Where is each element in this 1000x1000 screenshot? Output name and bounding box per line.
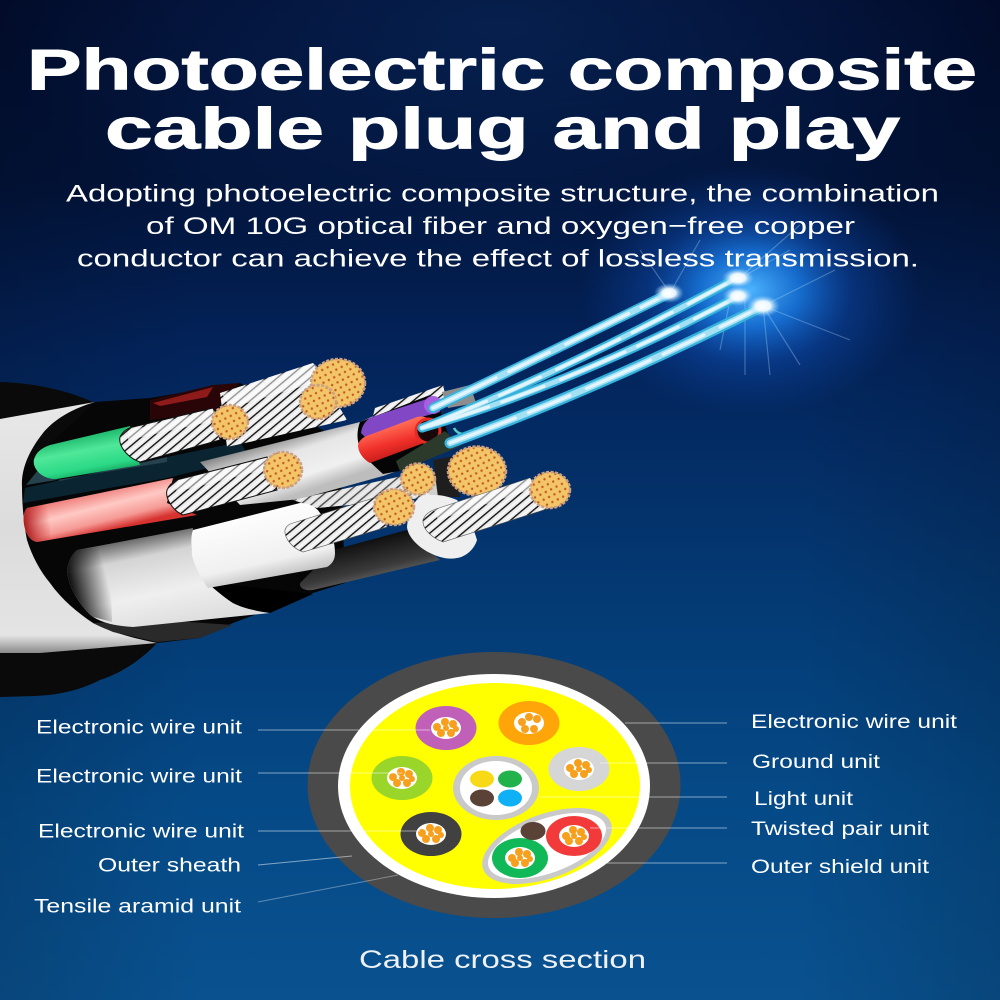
copper end bbox=[264, 452, 302, 488]
leader lines bbox=[258, 723, 727, 902]
outer black jacket bbox=[0, 382, 200, 697]
unit: orange wire bbox=[498, 701, 560, 745]
unit: grey ground wire bbox=[548, 747, 610, 791]
teal dark band bbox=[23, 442, 250, 503]
grey strand bundle bbox=[442, 385, 476, 408]
title bbox=[27, 38, 977, 162]
outer sheath bbox=[308, 652, 680, 918]
copper end bbox=[212, 405, 248, 439]
red tube opening bbox=[416, 419, 440, 443]
inner white shell bbox=[67, 528, 270, 627]
title: cable plug and play bbox=[105, 98, 900, 162]
shell dark fade bbox=[67, 545, 112, 622]
unit: black wire bbox=[400, 812, 462, 856]
dark tube opening bbox=[357, 395, 450, 474]
description text bbox=[66, 181, 939, 273]
dark green tube bbox=[396, 431, 461, 471]
red tube bbox=[358, 417, 440, 463]
right labels bbox=[751, 712, 958, 878]
white ring tube bbox=[407, 495, 477, 559]
unit: lime wire bbox=[372, 756, 432, 800]
copper end bbox=[401, 464, 435, 494]
teal small tube bbox=[454, 428, 476, 434]
diagram caption: Cable cross section bbox=[359, 946, 646, 974]
right labels: Twisted pair unit bbox=[751, 819, 930, 840]
pink tube red end bbox=[24, 503, 50, 542]
left labels: Tensile aramid unit bbox=[34, 897, 242, 918]
aramid yellow fill bbox=[350, 683, 640, 889]
copper end bbox=[374, 489, 414, 525]
right labels: Light unit bbox=[754, 789, 854, 810]
grey teal sliver bbox=[26, 457, 167, 485]
cavity under cylinder bbox=[207, 582, 313, 613]
strands from white cylinder bbox=[285, 497, 387, 552]
pink tube bbox=[24, 478, 197, 542]
dark red tube bbox=[150, 383, 240, 420]
strands from ring tube bbox=[423, 478, 550, 542]
purple tube bbox=[361, 397, 440, 437]
unit: purple wire bbox=[416, 706, 476, 750]
back strands highlight bbox=[222, 363, 330, 408]
red tube highlight bbox=[153, 387, 213, 406]
light glow at fiber tips bbox=[580, 165, 920, 415]
right labels: Electronic wire unit bbox=[751, 712, 958, 733]
green tube bbox=[34, 426, 140, 479]
left labels: Electronic wire unit bbox=[38, 822, 245, 843]
description text: conductor can achieve the effect of lossless transmission. bbox=[77, 246, 919, 273]
fiber light sparks bbox=[654, 268, 780, 317]
strands from pink tube bbox=[167, 457, 277, 515]
green strand highlight bbox=[128, 409, 218, 440]
lower mid strand lines bbox=[293, 475, 433, 508]
white cylinder bbox=[191, 503, 335, 588]
cross section diagram bbox=[308, 652, 680, 918]
inner sheath shadow band bbox=[93, 620, 233, 642]
white strands behind fibers bbox=[372, 385, 446, 420]
white layer bbox=[338, 674, 650, 898]
left labels: Outer sheath bbox=[98, 856, 241, 877]
optical fibers bbox=[422, 278, 763, 443]
pink strand highlight bbox=[176, 458, 271, 492]
dark interior of cable bbox=[22, 383, 345, 643]
strands from green tube bbox=[120, 408, 220, 462]
right labels: Ground unit bbox=[752, 752, 881, 773]
central white tube bbox=[200, 385, 446, 505]
purple tube opening bbox=[424, 396, 442, 414]
unit: light fibers bbox=[453, 756, 539, 820]
left labels: Electronic wire unit bbox=[36, 718, 243, 738]
ring strand highlight bbox=[434, 478, 538, 520]
title: Photoelectric composite bbox=[27, 38, 977, 102]
cable illustration bbox=[0, 359, 570, 697]
description text: Adopting photoelectric composite structure, the combination bbox=[66, 181, 939, 208]
description text: of OM 10G optical fiber and oxygen−free copper bbox=[146, 213, 855, 240]
lower mid strands bbox=[293, 475, 467, 508]
copper end small bbox=[300, 385, 336, 419]
black tube bbox=[300, 530, 440, 590]
dark strand bundle bbox=[433, 456, 460, 497]
white outer sheath bbox=[0, 402, 157, 653]
copper end bbox=[530, 472, 570, 508]
left labels: Electronic wire unit bbox=[36, 767, 243, 788]
unit: twisted pair bbox=[472, 793, 622, 899]
copper end large bbox=[448, 446, 506, 496]
copper end large bbox=[311, 359, 365, 407]
right labels: Outer shield unit bbox=[751, 857, 930, 878]
top back strands bbox=[220, 363, 347, 447]
left labels bbox=[34, 718, 245, 918]
